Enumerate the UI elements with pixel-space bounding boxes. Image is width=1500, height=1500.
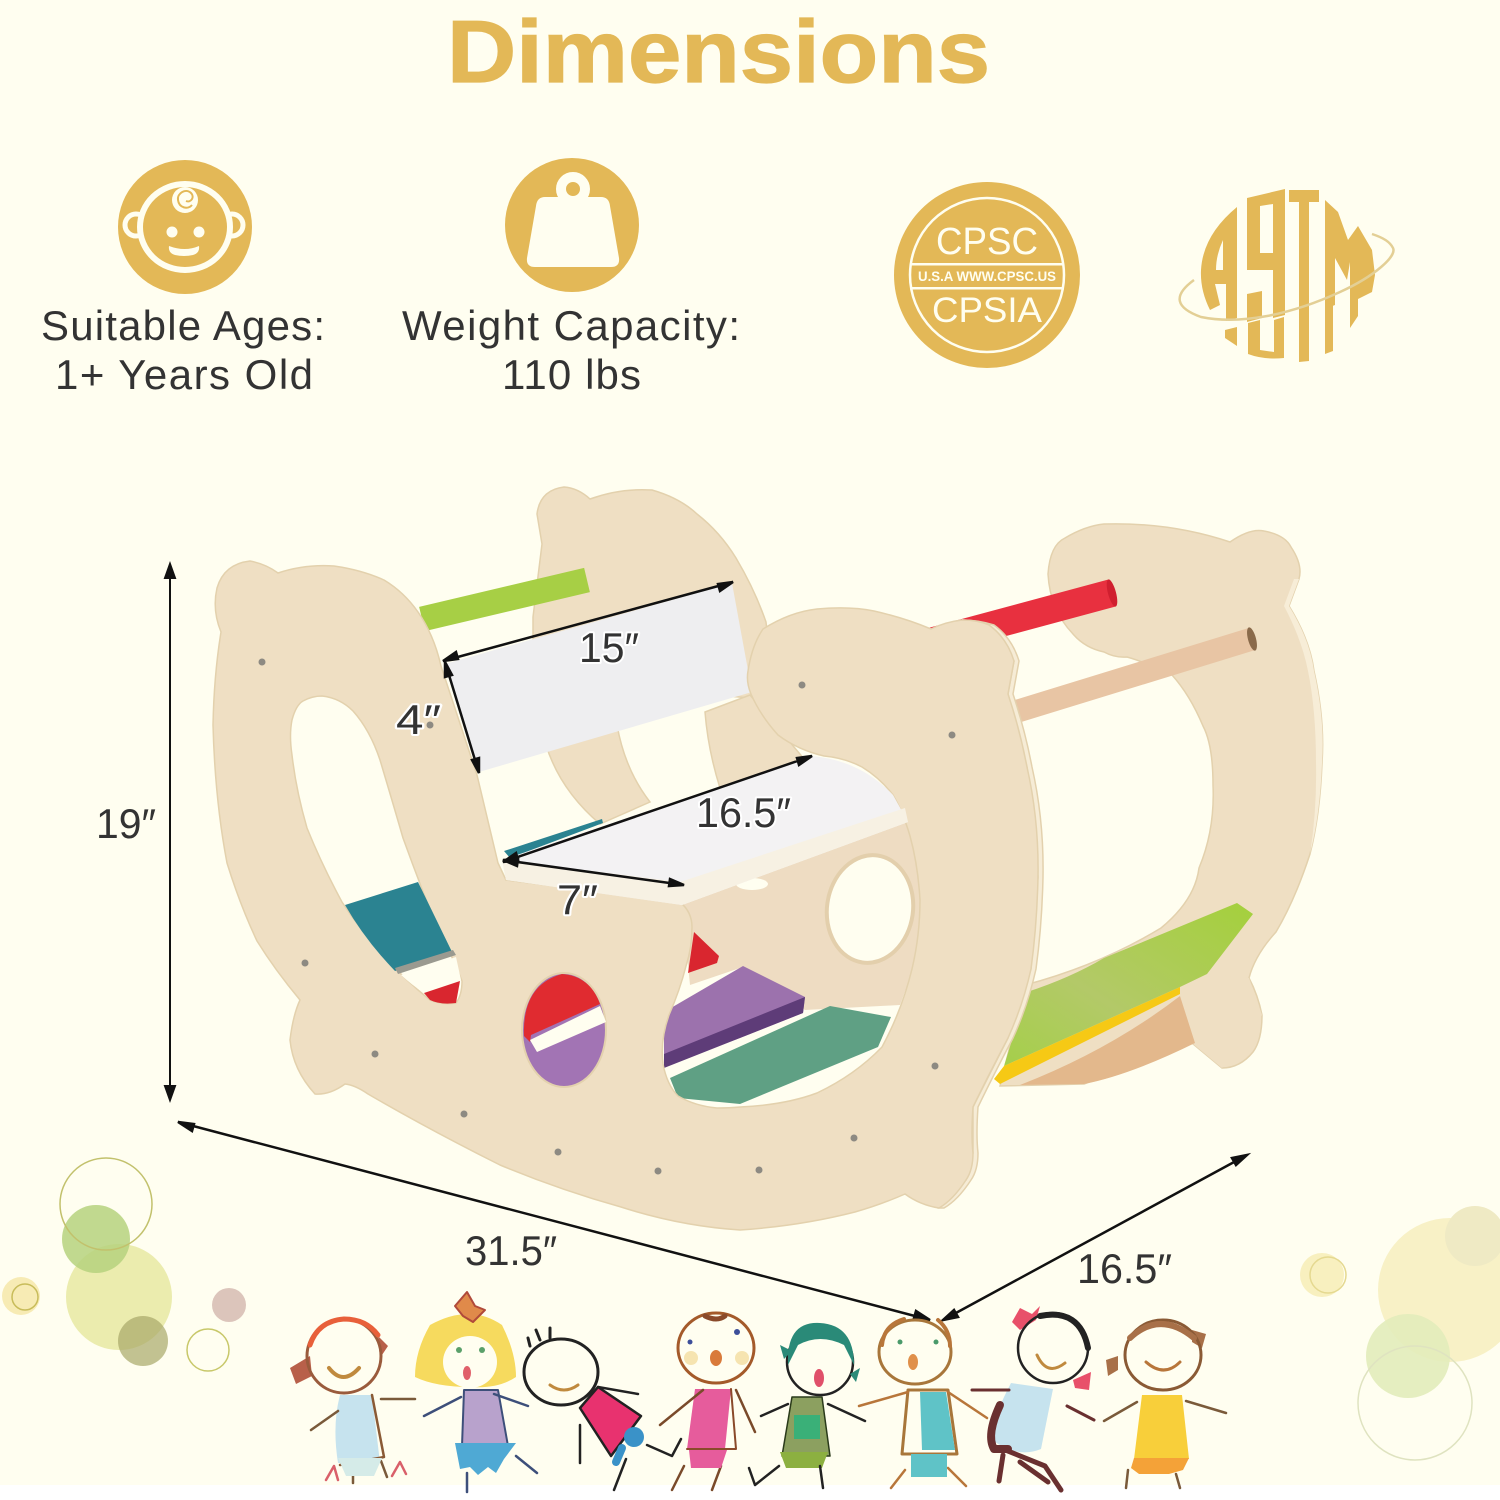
far left side panel crescents <box>546 695 805 824</box>
child 6 <box>859 1319 987 1488</box>
label: back width: 15″ <box>579 624 639 671</box>
badge: CPSC CPSIA: CPSC <box>936 221 1038 263</box>
thin teal slat <box>504 819 603 858</box>
title: Dimensions <box>447 2 990 101</box>
label: back height: 4″ <box>396 696 441 743</box>
child 4 <box>660 1313 755 1490</box>
child 1 <box>290 1319 415 1483</box>
left hole slats <box>345 882 453 971</box>
seat <box>502 756 908 905</box>
child 7 <box>972 1306 1094 1490</box>
text: weight capacity <box>402 302 740 398</box>
front panel edge <box>939 620 1043 1208</box>
text: suitable ages <box>41 302 325 398</box>
text: suitable ages: Suitable Ages: <box>41 302 325 349</box>
label: length: 31.5″ <box>465 1227 557 1274</box>
child 8 <box>1104 1320 1226 1488</box>
front panel <box>213 561 1038 1230</box>
far left side panel upper <box>533 487 775 700</box>
product: rocker <box>213 487 1323 1230</box>
far right side panel <box>1000 524 1323 1086</box>
arrow: seat depth <box>503 859 684 886</box>
arrow: seat width <box>503 756 812 862</box>
screws <box>258 658 956 1174</box>
badge: CPSC CPSIA: U.S.A WWW.CPSC.US <box>918 268 1056 284</box>
child 5 <box>749 1323 865 1488</box>
label: seat width: 16.5″ <box>696 789 791 836</box>
right slats <box>1004 903 1253 1066</box>
slats through opening <box>688 932 719 973</box>
under seat panel <box>682 822 922 1010</box>
bars <box>422 580 587 619</box>
badge: CPSC CPSIA: CPSIA <box>932 291 1043 330</box>
text: suitable ages: 1+ Years Old <box>55 351 313 398</box>
arrow: back width <box>443 582 733 661</box>
badge: ASTM <box>1180 189 1393 362</box>
icon: baby face <box>118 160 252 294</box>
label: seat depth: 7″ <box>557 876 598 923</box>
backrest <box>445 583 752 772</box>
badge: CPSC CPSIA <box>894 182 1080 368</box>
arrow: overall height <box>165 564 175 1100</box>
icon: weight <box>505 158 639 292</box>
child 3 <box>524 1328 681 1490</box>
label: width: 16.5″ <box>1077 1245 1172 1292</box>
text: weight capacity: 110 lbs <box>502 351 641 398</box>
decorative bubbles right <box>1300 1206 1500 1460</box>
round hole <box>522 973 606 1087</box>
child 2 <box>415 1292 537 1492</box>
illustration: children <box>290 1292 1226 1492</box>
text: weight capacity: Weight Capacity: <box>402 302 740 349</box>
arrow: back height <box>445 662 479 773</box>
label: height: 19″ <box>96 800 156 847</box>
arrow: width <box>943 1155 1247 1320</box>
arrow: length <box>178 1122 930 1320</box>
decorative bubbles left <box>2 1158 246 1371</box>
